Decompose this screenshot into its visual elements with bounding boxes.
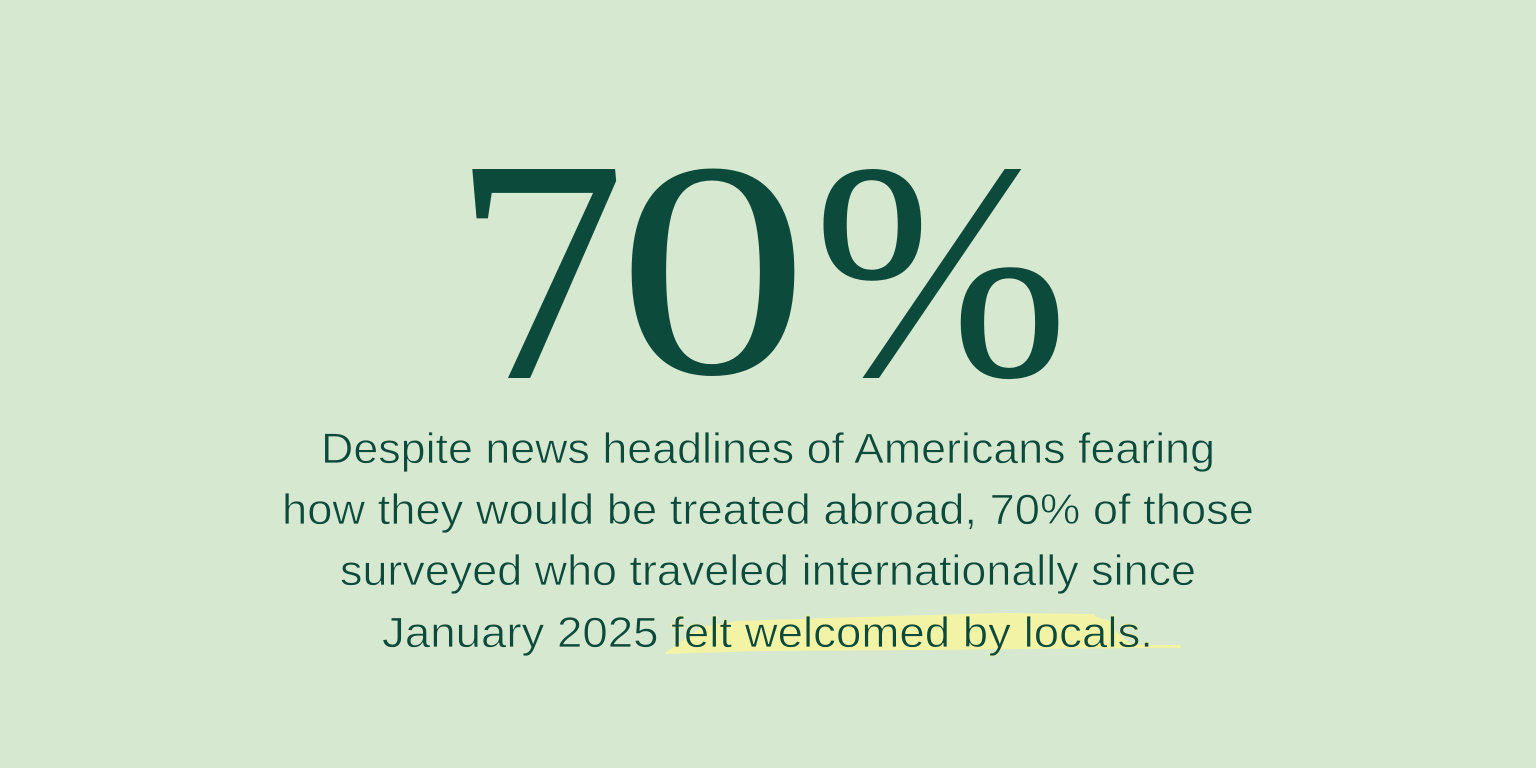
line 4: January 2025 felt welcomed by locals. (382, 609, 1153, 657)
line 1: Despite news headlines of Americans fearing (321, 425, 1215, 473)
line 2: how they would be treated abroad, 70% of those (282, 486, 1254, 534)
headline statistic: 70% (443, 94, 1069, 447)
highlighter swash behind key phrase (666, 613, 1181, 654)
line 3: surveyed who traveled internationally since (340, 547, 1196, 595)
body paragraph (282, 425, 1254, 657)
digit 7: 7 (443, 94, 649, 447)
percent sign: % (813, 99, 1069, 442)
digit 0: 0 (617, 100, 809, 440)
